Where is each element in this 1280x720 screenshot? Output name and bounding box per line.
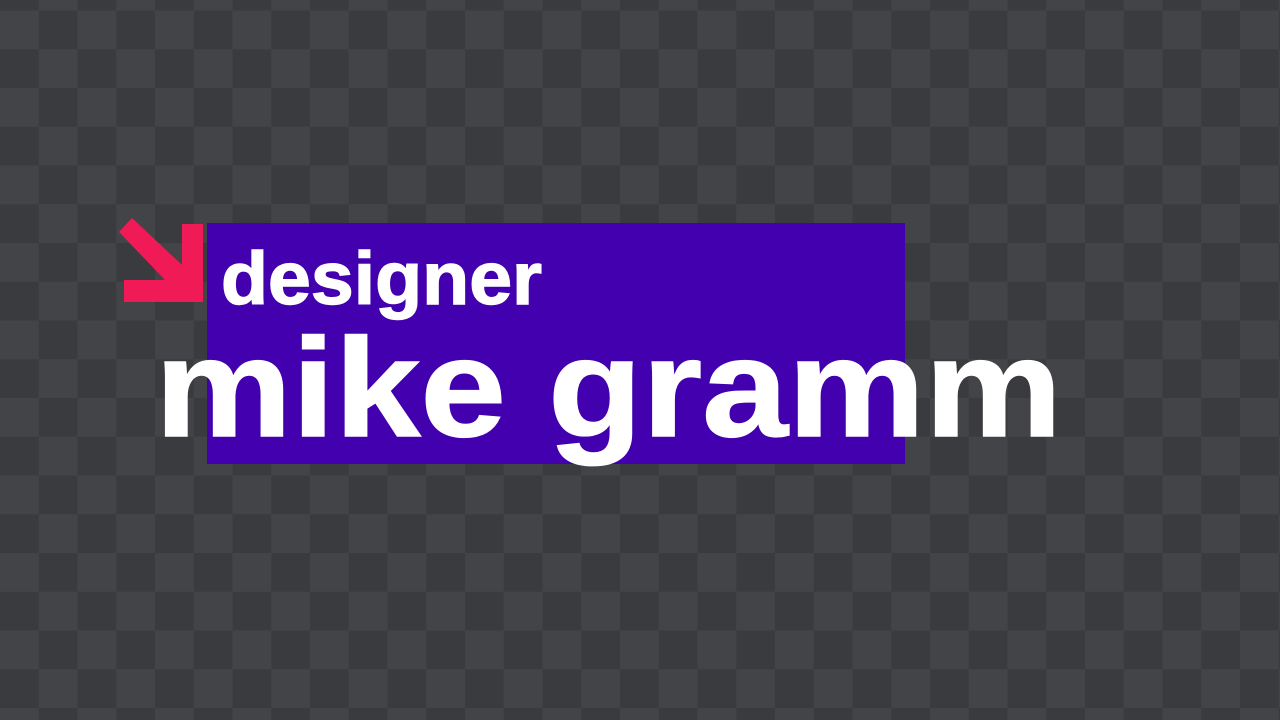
panel: purple name block bbox=[207, 223, 905, 464]
name heading: mike gramm bbox=[155, 309, 1062, 466]
name heading: mike gramm: gramm bbox=[548, 309, 1062, 466]
role label: designer: designer bbox=[221, 237, 542, 320]
name heading: mike gramm: mike bbox=[155, 309, 506, 466]
icon: pink diagonal arrow bbox=[119, 218, 203, 302]
